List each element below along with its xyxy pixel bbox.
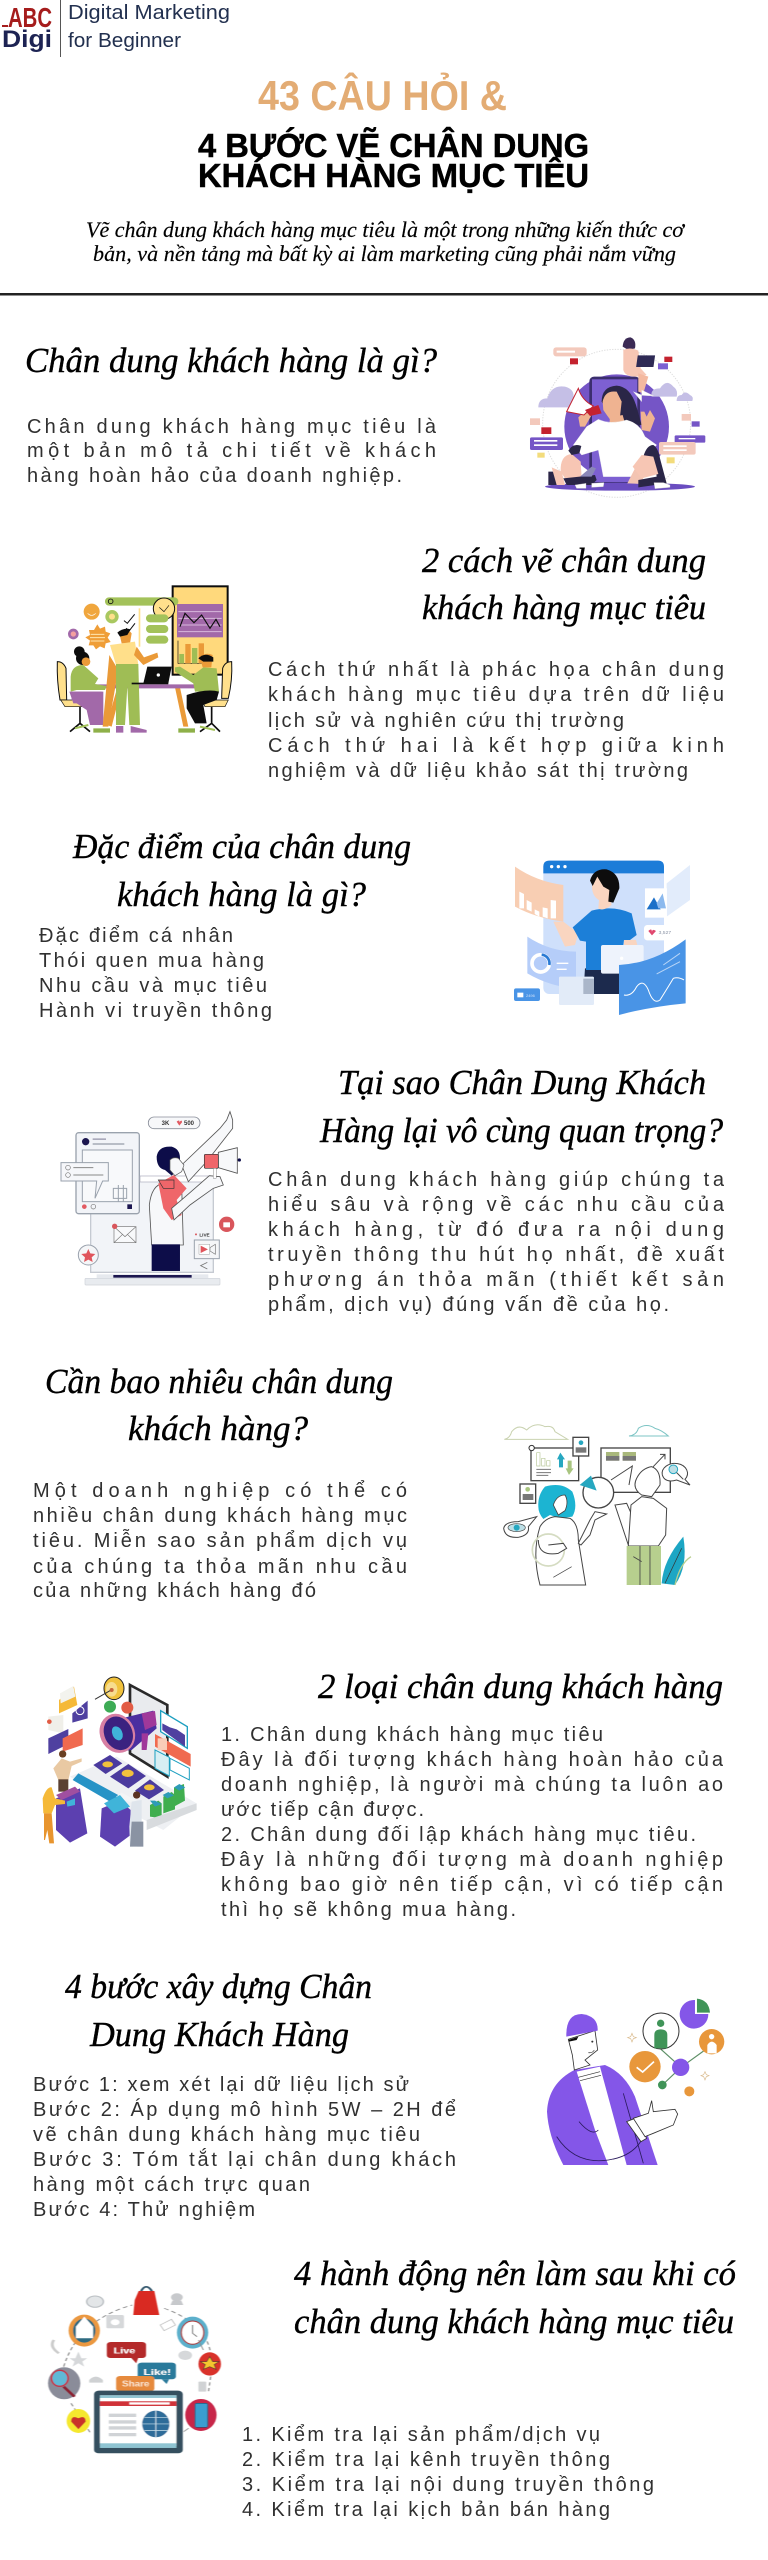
body text: tiêu. Miễn sao sản phẩm dịch vụ (33, 1529, 407, 1552)
icon: digital marketing circle: Like! (144, 2368, 171, 2377)
center person (119, 630, 132, 643)
body text: 3. Kiểm tra lại nội dung truyền thông (242, 2474, 654, 2496)
title: 43 CÂU HỎI & (258, 71, 507, 119)
body text: Đây là đối tượng khách hàng hoàn hảo của (221, 1749, 724, 1771)
heading: khách hàng là gì? (117, 875, 366, 914)
body text: không bao giờ nên tiếp cận, vì có tiếp cận (221, 1874, 723, 1896)
body text: Bước 2: Áp dụng mô hình 5W – 2H để (33, 2098, 456, 2121)
title: KHÁCH HÀNG MỤC TIÊU (198, 157, 589, 194)
body text: hiểu sâu và rộng về các nhu cầu của (268, 1194, 725, 1216)
body text: khách hàng mục tiêu dựa trên dữ liệu (268, 684, 724, 706)
body text (39, 925, 272, 1022)
body text (242, 2424, 654, 2521)
header logo: for Beginner (68, 30, 181, 52)
icon: man with blue dashboards: 3,527 (659, 930, 671, 936)
body text: Cách thứ nhất là phác họa chân dung (268, 659, 724, 681)
heading (422, 541, 706, 627)
heading (72, 827, 411, 914)
icon: man with blue dashboards (514, 861, 690, 1015)
intro text: Vẽ chân dung khách hàng mục tiêu là một trong những kiến thức cơ (86, 217, 685, 242)
icon: man with megaphone and social card: 500 (184, 1121, 195, 1127)
intro text (86, 217, 685, 266)
panel: why personas matter (61, 1063, 725, 1316)
chairs (57, 662, 67, 700)
icon: digital marketing circle: Share (122, 2380, 150, 2389)
heading (65, 1967, 372, 2054)
icon: two people analysing charts (504, 1425, 691, 1585)
body text: phẩm, dịch vụ) đúng vấn đề của họ. (268, 1294, 669, 1316)
heading: Hàng lại vô cùng quan trọng? (319, 1111, 723, 1150)
heading: chân dung khách hàng mục tiêu (294, 2302, 734, 2341)
laptop (143, 667, 172, 683)
heading: 2 cách vẽ chân dung (422, 541, 706, 580)
person (149, 1183, 183, 1245)
heading (45, 1362, 393, 1448)
icon: woman with megaphone and phone (530, 337, 705, 497)
header logo (2, 0, 230, 57)
pie (583, 1477, 614, 1508)
heading: Tại sao Chân Dung Khách (338, 1063, 706, 1102)
body text: lịch sử và nghiên cứu thị trường (268, 710, 624, 732)
heading: khách hàng mục tiêu (422, 588, 706, 627)
body text: Bước 3: Tóm tắt lại chân dung khách (33, 2148, 456, 2171)
header logo: Digital Marketing (68, 2, 230, 24)
intro text: bản, và nền tảng mà bất kỳ ai làm marketing cũng phải nắm vững (93, 241, 676, 266)
title: 4 BƯỚC VẼ CHÂN DUNG (198, 127, 589, 164)
bottom left woman (548, 472, 557, 485)
body text: ước tiếp cận được. (221, 1799, 424, 1821)
body text: một bản mô tả chi tiết về khách (27, 440, 436, 462)
bottom right woman (627, 468, 645, 484)
body text (268, 1169, 725, 1316)
people (53, 1758, 82, 1780)
panel: how many personas (33, 1362, 691, 1602)
icon: man with megaphone and social card: 3K (162, 1121, 170, 1127)
panel: what is a customer persona (25, 337, 705, 497)
icon: man with blue dashboards: 2496 (526, 993, 536, 998)
body text: 2. Kiểm tra lại kênh truyền thông (242, 2449, 610, 2471)
megaphone (218, 1148, 237, 1173)
body text (33, 2074, 456, 2221)
panel: two types of persona (43, 1667, 724, 1921)
body text: Một doanh nghiệp có thể có (33, 1480, 407, 1502)
body text: khách hàng, từ đó đưa ra nội dung (268, 1219, 724, 1241)
panel: four steps (33, 1967, 724, 2221)
body text: vẽ chân dung khách hàng mục tiêu (33, 2124, 420, 2146)
body text: của những khách hàng đó (33, 1580, 316, 1602)
body text: nhiều chân dung khách hàng mục (33, 1505, 407, 1527)
center woman (602, 386, 642, 425)
heading (319, 1063, 723, 1150)
table (107, 687, 188, 727)
heading: Dung Khách Hàng (89, 2015, 349, 2054)
body text (27, 416, 437, 487)
body text: Đặc điểm cá nhân (39, 925, 233, 947)
body text: của chúng ta thỏa mãn nhu cầu (33, 1556, 407, 1578)
title (198, 71, 589, 194)
body text: 4. Kiểm tra lại kịch bản bán hàng (242, 2499, 610, 2521)
heading: Đặc điểm của chân dung (72, 827, 411, 866)
man (615, 1503, 640, 1545)
panel: four actions (48, 2254, 736, 2521)
right person (200, 654, 213, 667)
body text: Chân dung khách hàng giúp chúng ta (268, 1169, 725, 1191)
heading: 4 bước xây dựng Chân (65, 1967, 372, 2006)
left person (74, 646, 85, 657)
heading: khách hàng? (128, 1409, 308, 1448)
body text: 1. Chân dung khách hàng mục tiêu (221, 1724, 603, 1746)
icon: digital marketing circle (48, 2287, 221, 2453)
woman (538, 1485, 575, 1519)
icon: digital marketing circle: Live (114, 2346, 135, 2356)
body text (33, 1480, 407, 1602)
body text: 2. Chân dung đối lập khách hàng mục tiêu. (221, 1824, 696, 1846)
panel: persona characteristics (39, 827, 690, 1022)
body text: Hành vi truyền thông (39, 1000, 272, 1022)
body text: thì họ sẽ không mua hàng. (221, 1899, 516, 1921)
body text: Cách thứ hai là kết hợp giữa kinh (268, 735, 724, 757)
top woman (623, 337, 635, 350)
torso (547, 2065, 658, 2165)
body text: Đây là những đối tượng mà doanh nghiệp (221, 1849, 723, 1871)
body text: Bước 4: Thử nghiệm (33, 2199, 255, 2221)
heading (294, 2254, 736, 2341)
header logo: Digi (2, 26, 52, 53)
body text (268, 659, 724, 782)
body text: hàng hoàn hảo của doanh nghiệp. (27, 465, 402, 487)
heading: 4 hành động nên làm sau khi có (294, 2254, 736, 2293)
body text: Nhu cầu và mục tiêu (39, 975, 267, 997)
head (568, 2031, 598, 2070)
icon: man with megaphone and social card (61, 1112, 241, 1285)
heading: Chân dung khách hàng là gì? (25, 341, 437, 380)
body text: doanh nghiệp, là người mà chúng ta luôn ao (221, 1774, 723, 1796)
body text: Bước 1: xem xét lại dữ liệu lịch sử (33, 2074, 409, 2096)
body text: Chân dung khách hàng mục tiêu là (27, 416, 437, 438)
body text: Thói quen mua hàng (39, 950, 264, 972)
panel: two ways to draw a persona (57, 541, 724, 782)
heading: Cần bao nhiêu chân dung (45, 1362, 393, 1401)
icon: man in purple with network (547, 1999, 724, 2165)
body text: nghiệm và dữ liệu khảo sát thị trường (268, 760, 688, 782)
icon: man with megaphone and social card: LIVE (199, 1232, 210, 1237)
header logo: ABC (8, 2, 52, 33)
body text (221, 1724, 724, 1921)
heading: 2 loại chân dung khách hàng (318, 1667, 723, 1706)
icon: team meeting at table (57, 586, 232, 733)
body text: phương án thỏa mãn (thiết kết sản (268, 1269, 724, 1291)
body text: hàng một cách trực quan (33, 2174, 310, 2196)
body text: 1. Kiểm tra lại sản phẩm/dịch vụ (242, 2424, 600, 2446)
body text: truyền thông thu hút họ nhất, đề xuất (268, 1244, 724, 1266)
icon: isometric marketing megaphone (43, 1677, 197, 1847)
